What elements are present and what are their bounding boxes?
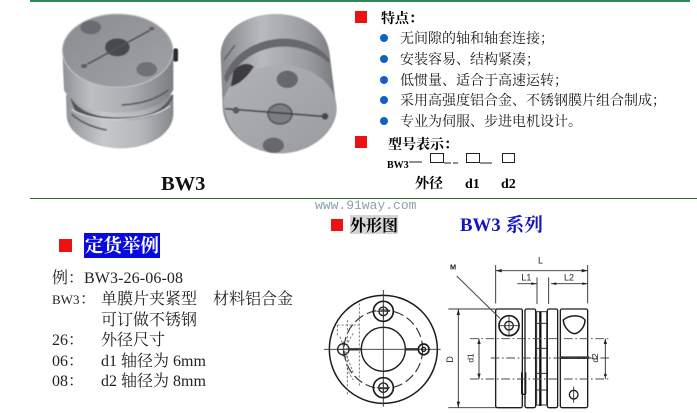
d1 explanation [52,352,206,370]
end face [223,65,337,153]
dimension lines [448,265,605,408]
slot marks [224,45,235,60]
hub segments [496,309,588,408]
dimension labels: D [445,356,455,363]
code labels [415,175,516,192]
outline highlight [350,215,398,234]
code labels: d2 [501,177,516,192]
panel: order example text [52,269,293,390]
top face [62,14,173,87]
lower hub rim highlight [72,106,170,119]
top green rule [30,0,690,2]
order marker [59,239,72,252]
photo: coupling, top view [62,14,178,148]
end face holes [225,71,328,153]
membrane gap [68,93,173,120]
panel: features [355,10,666,130]
dimension labels: d2 [590,353,600,363]
product label: BW3 [161,173,205,195]
series title: BW3 系列 [460,213,543,236]
feature item 3: 低惯量、适合于高速运转； [400,72,568,89]
d1 explanation: d1 轴径为 6mm [101,352,206,370]
BW3 explanation: 材料铝合金 [213,290,293,308]
cylinder body [221,14,337,153]
membrane gap band [224,39,330,83]
dimension labels: d1 [465,353,475,363]
model marker [355,136,367,148]
set screw recess [231,64,254,87]
clamp screw [173,48,178,62]
dimension labels: L [538,255,543,265]
membrane stack [537,312,547,406]
outline marker [331,219,343,231]
lower hub [66,95,173,148]
side slots [72,90,168,130]
dimension labels: M [450,262,456,271]
small hole [569,387,578,403]
screw M [498,316,520,336]
heading highlight [84,233,160,258]
size explanation: 外径尺寸 [101,331,165,349]
d1 explanation: 06： [52,353,84,370]
upper hub [62,50,173,113]
feature item 2: 安装容易、结构紧凑； [400,51,540,68]
model prefix: BW3 [387,160,409,171]
dimension labels: L2 [564,273,574,283]
code labels: d1 [465,177,480,192]
middle green rule [30,198,697,199]
feature item 4: 采用高强度铝合金、不锈钢膜片组合制成； [400,92,666,109]
d2 explanation [52,372,206,390]
website watermark: www.91way.com [315,198,417,213]
d2 explanation: d2 轴径为 8mm [101,372,206,390]
outline drawing heading [331,215,398,235]
feature item 1: 无间隙的轴和轴套连接； [400,30,554,47]
code boxes [409,154,514,163]
dimension labels: L1 [521,273,531,283]
top face holes [80,20,157,77]
features marker [355,11,367,23]
example line: 例： [52,270,84,287]
code labels: 外径 [415,175,444,192]
slot [522,372,526,394]
BW3 explanation [52,290,293,329]
size explanation [52,331,165,349]
centerlines [470,339,612,379]
model heading: 型号表示： [388,136,458,153]
slit [561,354,589,362]
example line: BW3-26-06-08 [84,270,183,287]
technical drawing: front view [324,290,441,407]
d2 explanation: 08： [52,373,84,390]
BW3 explanation: BW3 [52,292,79,307]
BW3 explanation: 单膜片夹紧型 [101,290,197,308]
dimension labels [445,255,600,363]
feature item 5: 专业为伺服、步进电机设计。 [400,113,582,130]
BW3 explanation: 可订做不锈钢 [101,311,197,329]
technical drawing: side view [445,255,612,408]
outline text: 外形图 [350,217,398,235]
arrowheads [457,269,607,408]
screw window [563,316,585,334]
order example heading [59,233,160,258]
leader M [457,276,500,318]
size explanation: 26： [52,332,84,349]
BW3 explanation: ： [80,291,96,308]
photo: coupling, rear view [221,14,337,153]
heading text: 定货举例 [85,235,159,257]
panel: model code [355,136,516,192]
features heading: 特点： [381,10,423,27]
